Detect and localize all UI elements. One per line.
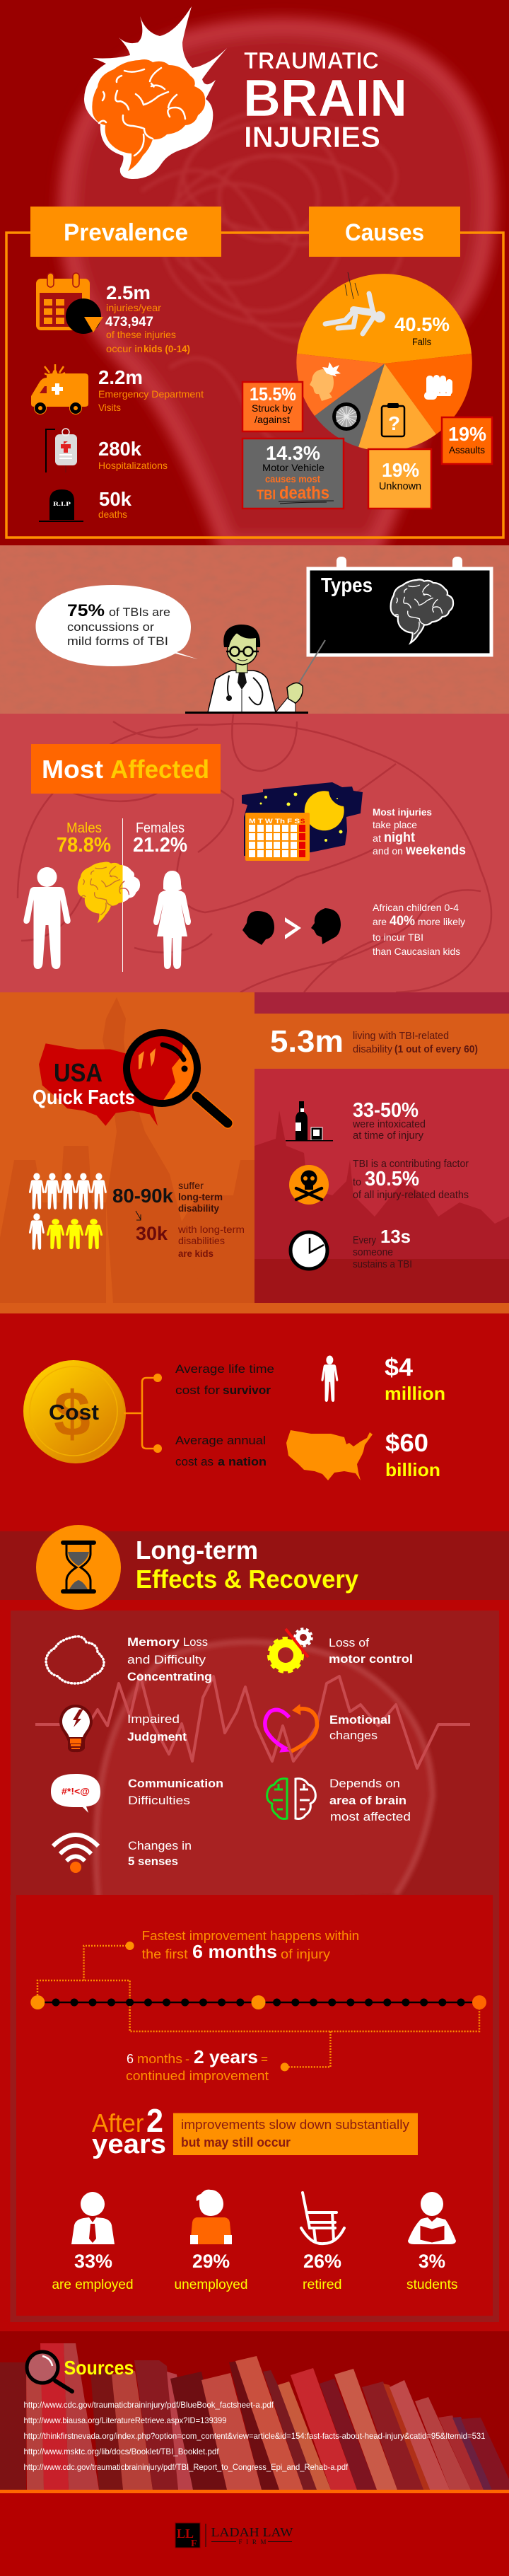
icon: bottle and glass bbox=[286, 1101, 333, 1142]
text: memory bbox=[127, 1635, 212, 1683]
source links: http://www.msktc.org/lib/docs/Booklet/TBI_Booklet.pdf bbox=[24, 2447, 219, 2456]
text: area of brain: Depends on bbox=[329, 1777, 400, 1790]
stat: females: 21.2% bbox=[133, 834, 187, 857]
title: TRAUMATIC bbox=[244, 47, 379, 74]
text: after 2 years: After bbox=[92, 2108, 144, 2137]
text: motor control bbox=[329, 1636, 413, 1666]
stat: 5.3m living with disability: (1 out of every 60) bbox=[394, 1043, 478, 1055]
text: first 6 months: the first bbox=[142, 1947, 188, 1961]
panel: most affected bbox=[0, 714, 509, 992]
icon: magnifier bbox=[27, 2352, 72, 2391]
stat: 2.2m emergency visits: Visits bbox=[98, 402, 121, 413]
stat: employed: are employed bbox=[52, 2278, 133, 2292]
stat: $4 million bbox=[385, 1354, 445, 1404]
icon: tire bbox=[332, 402, 361, 431]
stat: 30.5% contributing factor: TBI is a contributing factor bbox=[353, 1158, 469, 1170]
panel: cost bbox=[0, 1313, 509, 2331]
stat: 2.2m emergency visits bbox=[98, 366, 204, 413]
logo: Ladah Law Firm: LADAH LAW bbox=[211, 2525, 293, 2539]
stat: employed bbox=[52, 2192, 133, 2292]
panel: footer bbox=[0, 2490, 509, 2576]
text: annual national cost bbox=[175, 1434, 267, 1468]
icon: child silhouettes comparison bbox=[242, 908, 341, 945]
icon: clipboard question bbox=[382, 403, 404, 436]
connector: cost branches bbox=[124, 1374, 162, 1453]
text: first 6 months bbox=[142, 1929, 359, 1962]
text: night and weekends: and on bbox=[373, 845, 403, 857]
stat: 2.5m injuries per year: 473,947 bbox=[105, 315, 153, 330]
text: judgment bbox=[127, 1712, 187, 1744]
stat: 80-90k and 30k bbox=[112, 1180, 245, 1259]
callout: motor vehicle 14.3%: deaths bbox=[279, 483, 329, 503]
panel: prevalence and causes bbox=[6, 207, 503, 538]
text: five senses: Changes in bbox=[128, 1839, 192, 1852]
stat: 30.5% contributing factor: 30.5% bbox=[365, 1168, 419, 1190]
icon: night calendar: S bbox=[300, 818, 305, 825]
icon: fist bbox=[424, 375, 452, 400]
icon: tombstone bbox=[39, 489, 83, 522]
text: area of brain: area of brain bbox=[329, 1794, 406, 1807]
speech bubble: 75%: of TBIs are bbox=[109, 605, 170, 619]
stat: 2.5m injuries per year: of these injuries bbox=[106, 329, 176, 340]
label: falls: Falls bbox=[412, 336, 431, 347]
callout: assaults 19%: Assaults bbox=[449, 444, 485, 456]
stat: students bbox=[406, 2192, 458, 2292]
text: night and weekends: at bbox=[373, 832, 381, 844]
text: 6 months to 2 years: months bbox=[137, 2052, 182, 2066]
source links: http://www.cdc.gov/traumaticbraininjury/pdf/TBI_Report_to_Congress_Epi_and_Rehab-a.pdf bbox=[24, 2462, 349, 2472]
stat: 80-90k and 30k: disability bbox=[178, 1202, 219, 1214]
icon: gold coin: Cost bbox=[49, 1400, 99, 1425]
logo: Ladah Law Firm: FIRM bbox=[239, 2539, 266, 2546]
stat: every 13s: sustains a TBI bbox=[353, 1258, 412, 1270]
text: after 2 years: 2 bbox=[146, 2102, 163, 2139]
stat: 5.3m living with disability bbox=[270, 1024, 478, 1059]
stat: retired bbox=[301, 2193, 344, 2292]
text: night and weekends: take place bbox=[373, 819, 417, 830]
title bbox=[243, 47, 407, 153]
text: 6 months to 2 years: = bbox=[261, 2052, 268, 2066]
icon: exploding brain logo bbox=[84, 6, 227, 179]
callout: unknown 19%: Unknown bbox=[379, 480, 421, 492]
label: falls: 40.5% bbox=[394, 313, 450, 335]
heading: Prevalence: Prevalence bbox=[64, 219, 188, 246]
label: falls bbox=[394, 313, 450, 347]
icon: split brain outlines bbox=[267, 1779, 315, 1818]
callout: struck by 15.5%: /against bbox=[255, 414, 290, 425]
icon: night calendar bbox=[242, 782, 363, 861]
text: 6 months to 2 years: 6 bbox=[127, 2052, 134, 2066]
stat: 2.5m injuries per year: injuries/year bbox=[106, 302, 161, 313]
stat: males: 78.8% bbox=[57, 834, 111, 857]
text: lifetime survivor cost: Average life time bbox=[175, 1362, 274, 1376]
stat: 280k hospitalizations bbox=[98, 438, 168, 471]
text: african children: to incur TBI bbox=[373, 932, 423, 943]
callout: motor vehicle 14.3%: TBI bbox=[257, 488, 276, 503]
stat: 80-90k and 30k: 80-90k bbox=[112, 1185, 173, 1207]
stat: retired: 26% bbox=[303, 2251, 341, 2272]
stat: 50k deaths: deaths bbox=[98, 509, 127, 520]
text: memory: Memory bbox=[127, 1635, 180, 1649]
text: annual national cost: cost as bbox=[175, 1455, 213, 1468]
stat: every 13s: someone bbox=[353, 1246, 393, 1258]
callout: improvements slow down: but may still occur bbox=[181, 2135, 291, 2149]
text: after 2 years: years bbox=[92, 2130, 166, 2159]
panel: sources bbox=[0, 2331, 509, 2490]
stat: $4 million: million bbox=[385, 1383, 445, 1404]
panel: recovery bbox=[10, 1895, 499, 2322]
stat: 33-50% intoxicated: were intoxicated bbox=[352, 1118, 426, 1130]
title: USA quick facts with map and magnifier: Quick Facts bbox=[33, 1086, 135, 1109]
text: communication: Difficulties bbox=[128, 1794, 190, 1807]
background: head section bbox=[0, 0, 509, 545]
text: area of brain: most affected bbox=[330, 1810, 411, 1823]
text: annual national cost: a nation bbox=[218, 1455, 267, 1468]
stat: 80-90k and 30k: long-term bbox=[178, 1191, 223, 1202]
speech bubble: 75%: concussions or bbox=[67, 620, 154, 634]
text: memory: and Difficulty bbox=[127, 1653, 206, 1666]
title: BRAIN bbox=[243, 69, 407, 127]
text: lifetime survivor cost: survivor bbox=[223, 1383, 271, 1397]
icon: heart arrows bbox=[265, 1705, 317, 1752]
heading text bbox=[136, 1536, 358, 1594]
stat: 80-90k and 30k: 30k bbox=[136, 1223, 168, 1244]
source links: http://www.cdc.gov/traumaticbraininjury/pdf/BlueBook_factsheet-a.pdf bbox=[24, 2400, 274, 2410]
icon: calendar with pie bbox=[36, 273, 103, 334]
stat: 2.5m injuries per year bbox=[105, 282, 190, 354]
text: memory: Concentrating bbox=[127, 1670, 212, 1683]
stat: 33-50% intoxicated: at time of injury bbox=[353, 1130, 423, 1142]
heading: most affected bbox=[31, 744, 221, 794]
icon: male figure bbox=[23, 867, 71, 969]
stat: students: 3% bbox=[419, 2251, 445, 2272]
icon: clock bbox=[291, 1232, 327, 1269]
source links bbox=[24, 2400, 486, 2472]
icon: night calendar: M T W Th F S bbox=[249, 818, 300, 825]
stat: males bbox=[57, 820, 111, 857]
source links: http://thinkfirstnevada.org/index.php?option=com_content&view=article&id=154:fast-facts-about-head-injury&catid=95&Itemid=531 bbox=[24, 2431, 486, 2441]
stat: females bbox=[133, 820, 187, 857]
text: african children: are bbox=[373, 916, 387, 927]
callout: motor vehicle 14.3%: 14.3% bbox=[266, 442, 320, 464]
text: 6 months to 2 years: continued improvement bbox=[126, 2069, 269, 2083]
icon: person bbox=[321, 1355, 338, 1402]
timeline: recovery stages bbox=[30, 1942, 486, 2071]
logo: Ladah Law Firm: LL bbox=[177, 2526, 194, 2541]
text: lifetime survivor cost: cost for bbox=[175, 1383, 220, 1397]
stat: 280k hospitalizations: Hospitalizations bbox=[98, 460, 168, 471]
stat: 30.5% contributing factor bbox=[353, 1158, 469, 1201]
callout: unknown 19% bbox=[368, 449, 431, 509]
text: five senses bbox=[128, 1839, 192, 1868]
icon: female figure bbox=[153, 871, 191, 969]
icon: tombstone: R.I.P bbox=[53, 501, 71, 507]
text: first 6 months: of injury bbox=[281, 1947, 330, 1961]
text: emotional bbox=[329, 1713, 391, 1742]
title: INJURIES bbox=[244, 120, 380, 153]
icon: ambulance bbox=[31, 364, 88, 414]
stat: 2.5m injuries per year: occur in bbox=[106, 343, 143, 354]
text: motor control: motor control bbox=[329, 1652, 413, 1666]
text: 6 months to 2 years bbox=[126, 2046, 269, 2083]
heading text: Long-term bbox=[136, 1536, 258, 1565]
text: night and weekends: Most injuries bbox=[373, 806, 432, 818]
text: night and weekends: weekends bbox=[405, 843, 466, 858]
text: memory: Loss bbox=[183, 1635, 208, 1649]
text: judgment: Impaired bbox=[127, 1712, 180, 1726]
stat: 5.3m living with disability: 5.3m bbox=[270, 1024, 344, 1059]
stat: 2.5m injuries per year: 2.5m bbox=[106, 282, 151, 303]
stat: 80-90k and 30k: disabilities bbox=[178, 1235, 225, 1246]
heading: Causes: Causes bbox=[345, 219, 424, 246]
decorative head x-ray bbox=[67, 26, 488, 545]
callout: struck by 15.5%: 15.5% bbox=[250, 383, 296, 405]
speech bubble: 75%: 75% bbox=[67, 601, 105, 620]
stat: $60 billion: billion bbox=[385, 1459, 440, 1480]
icon: hourglass bbox=[36, 1525, 121, 1610]
stat: 50k deaths: 50k bbox=[99, 488, 131, 510]
text: african children: African children 0-4 bbox=[373, 902, 459, 913]
callout: assaults 19%: 19% bbox=[448, 423, 486, 445]
stat: 33-50% intoxicated: 33-50% bbox=[353, 1099, 419, 1122]
stat: 5.3m living with disability: living with TBI-related bbox=[353, 1030, 449, 1042]
icon: signal waves bbox=[53, 1835, 98, 1873]
icon: speech bubble symbols: #*!<@ bbox=[62, 1786, 90, 1797]
stat: unemployed: 29% bbox=[192, 2251, 230, 2272]
text: area of brain bbox=[329, 1777, 411, 1823]
icon: falling person bbox=[325, 272, 385, 334]
stat: 5.3m living with disability: disability bbox=[353, 1043, 392, 1055]
icon: gold coin: $ bbox=[54, 1379, 90, 1450]
title: USA quick facts with map and magnifier: USA bbox=[54, 1058, 103, 1087]
logo: Ladah Law Firm: F bbox=[191, 2539, 197, 2549]
icon: dotted cloud (memory) bbox=[46, 1637, 104, 1683]
stat: 2.2m emergency visits: Emergency Department bbox=[98, 388, 204, 400]
chalkboard: types bbox=[308, 557, 491, 655]
panel: USA quick facts bbox=[0, 992, 509, 1313]
icon: people rows bbox=[29, 1173, 107, 1250]
stat: employed: 33% bbox=[74, 2251, 112, 2272]
text: judgment: Judgment bbox=[127, 1730, 187, 1744]
text: emotional: changes bbox=[329, 1729, 378, 1742]
icon: US map bbox=[286, 1430, 373, 1480]
callout: improvements slow down bbox=[173, 2113, 418, 2155]
heading: most affected: Affected bbox=[110, 755, 209, 784]
text: african children: than Caucasian kids bbox=[373, 946, 460, 957]
callout: struck by 15.5%: Struck by bbox=[252, 402, 293, 414]
text: motor control: Loss of bbox=[329, 1636, 369, 1649]
heading: most affected: Most bbox=[42, 755, 103, 784]
stat: students: students bbox=[406, 2278, 458, 2292]
speech bubble: 75% bbox=[35, 585, 198, 666]
stat: 80-90k and 30k: suffer bbox=[178, 1180, 204, 1191]
text: annual national cost: Average annual bbox=[175, 1434, 266, 1447]
icon: broken bulb bbox=[59, 1705, 93, 1752]
text: five senses: 5 senses bbox=[128, 1855, 178, 1868]
text: 6 months to 2 years: 2 years bbox=[194, 2046, 258, 2067]
text: communication bbox=[128, 1777, 223, 1807]
stat: males: Males bbox=[66, 820, 102, 836]
stat: every 13s: Every bbox=[353, 1234, 376, 1246]
stat: $4 million: $4 bbox=[385, 1354, 414, 1381]
logo: Ladah Law Firm bbox=[175, 2523, 293, 2549]
callout: struck by 15.5% bbox=[242, 382, 303, 431]
icon: gold coin bbox=[23, 1360, 126, 1463]
callout: motor vehicle 14.3%: causes most bbox=[265, 473, 320, 485]
icon: clipboard question: ? bbox=[388, 412, 400, 434]
icon: skull and crossbones bbox=[289, 1165, 329, 1205]
stat: 50k deaths bbox=[98, 488, 131, 520]
stat: 80-90k and 30k: with long-term bbox=[177, 1224, 245, 1235]
heading band: long-term effects and recovery bbox=[0, 1525, 509, 1610]
callout: improvements slow down: improvements slow down substantially bbox=[181, 2118, 409, 2132]
stat: $60 billion bbox=[385, 1429, 440, 1480]
panel: types bbox=[0, 545, 509, 714]
callout: unknown 19%: 19% bbox=[382, 459, 419, 481]
stat: 33-50% intoxicated bbox=[352, 1099, 426, 1142]
pie chart: causes bbox=[296, 272, 472, 451]
text: 6 months to 2 years: - bbox=[185, 2052, 189, 2066]
text: african children: 40% bbox=[390, 914, 415, 929]
stat: 30.5% contributing factor: to bbox=[353, 1176, 361, 1188]
icon: head impact bbox=[310, 362, 341, 401]
chalkboard: types: Types bbox=[321, 574, 373, 597]
text: first 6 months: Fastest improvement happens within bbox=[142, 1929, 359, 1943]
stat: females: Females bbox=[136, 820, 185, 836]
title: USA quick facts with map and magnifier bbox=[33, 1026, 228, 1126]
stat: 2.5m injuries per year: kids (0-14) bbox=[144, 343, 190, 354]
text: communication: Communication bbox=[128, 1777, 223, 1790]
stat: 2.2m emergency visits: 2.2m bbox=[98, 366, 143, 388]
stat: unemployed: unemployed bbox=[174, 2278, 247, 2292]
stat: every 13s: 13s bbox=[380, 1226, 411, 1247]
callout: assaults 19% bbox=[442, 417, 492, 464]
callout: motor vehicle 14.3%: Motor Vehicle bbox=[262, 462, 324, 473]
icon: speech bubble symbols bbox=[51, 1774, 100, 1813]
text: after 2 years bbox=[92, 2102, 166, 2159]
heading: sources: Sources bbox=[64, 2357, 134, 2379]
text: african children: more likely bbox=[418, 916, 465, 927]
source links: http://www.biausa.org/LiteratureRetrieve.aspx?ID=139399 bbox=[24, 2415, 227, 2425]
illustration: doctor bbox=[185, 625, 325, 714]
text: night and weekends bbox=[373, 806, 466, 858]
stat: $60 billion: $60 bbox=[385, 1429, 428, 1457]
text: emotional: Emotional bbox=[329, 1713, 391, 1727]
heading: Causes bbox=[309, 207, 460, 257]
stat: 30.5% contributing factor: of all injury-related deaths bbox=[353, 1189, 469, 1201]
icon: IV bag bbox=[46, 429, 77, 472]
stat: 80-90k and 30k: are kids bbox=[178, 1248, 213, 1259]
icon: split brain bbox=[78, 861, 140, 923]
speech bubble: 75%: mild forms of TBI bbox=[67, 634, 168, 648]
panel: long-term effects bbox=[11, 1611, 499, 1910]
text: lifetime survivor cost bbox=[175, 1362, 274, 1397]
callout: motor vehicle 14.3% bbox=[242, 439, 344, 509]
stat: retired: retired bbox=[303, 2278, 342, 2292]
text: night and weekends: night bbox=[384, 830, 416, 845]
text: african children bbox=[373, 902, 465, 957]
text: first 6 months: 6 months bbox=[192, 1941, 277, 1962]
heading: Prevalence bbox=[30, 207, 221, 257]
stat: unemployed bbox=[174, 2190, 247, 2292]
stat: 280k hospitalizations: 280k bbox=[98, 438, 141, 460]
heading text: Effects & Recovery bbox=[136, 1565, 358, 1594]
stat: every 13s bbox=[353, 1226, 412, 1270]
icon: gears bbox=[269, 1629, 312, 1671]
